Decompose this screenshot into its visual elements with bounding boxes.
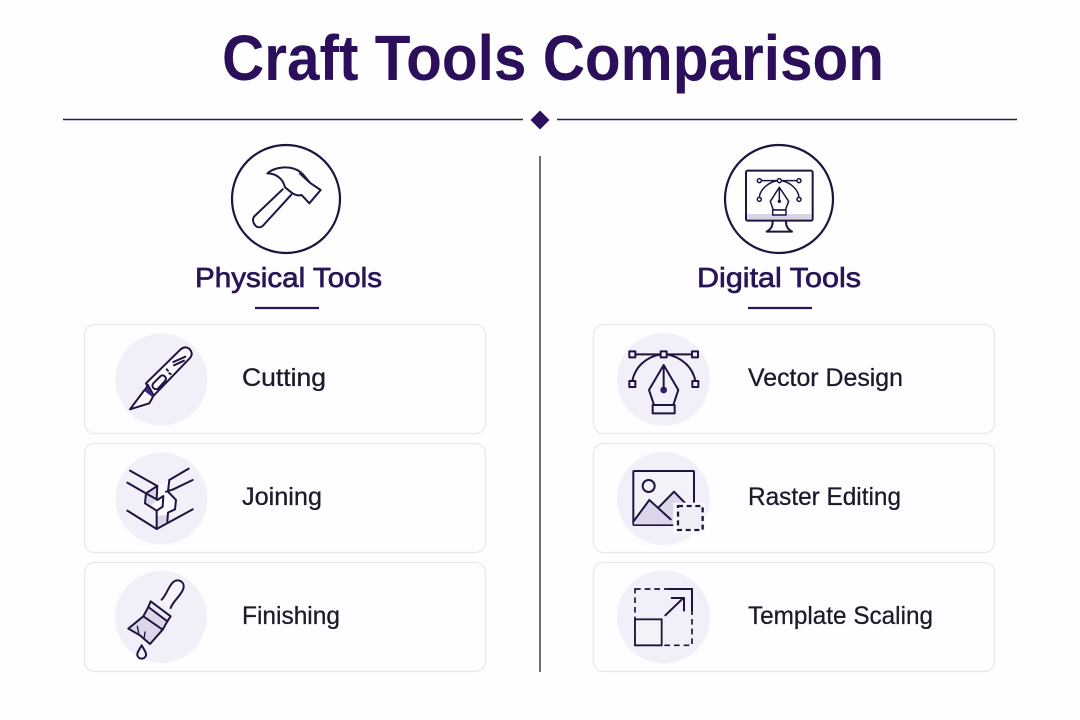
label: finishing: Finishing <box>242 602 340 630</box>
label: cutting: Cutting <box>242 364 326 392</box>
icon: monitor with pen tool in circle <box>725 145 833 253</box>
card: template scaling <box>594 562 994 672</box>
icon: image with dashed selection <box>633 471 705 533</box>
icon: hammer in circle <box>232 145 340 253</box>
card: joining <box>84 444 486 552</box>
card: raster editing <box>594 444 994 552</box>
panel: physical tools <box>84 145 486 672</box>
card: finishing <box>84 562 486 672</box>
column divider <box>539 156 541 672</box>
title divider with diamond <box>63 110 1017 130</box>
heading underline <box>255 307 319 309</box>
label: vector design: Vector Design <box>748 364 903 392</box>
icon: scale template <box>635 589 692 645</box>
title: Craft Tools Comparison <box>222 22 884 94</box>
label: joining: Joining <box>242 483 322 511</box>
label: raster editing: Raster Editing <box>748 483 901 511</box>
heading: digital tools: Digital Tools <box>697 262 861 293</box>
icon: pen tool <box>629 351 698 413</box>
card: vector design <box>594 324 994 434</box>
panel: digital tools <box>594 145 994 672</box>
heading underline <box>748 307 812 309</box>
card: cutting <box>84 324 486 434</box>
icon: craft knife <box>130 347 192 409</box>
icon: wood joint <box>127 469 193 529</box>
icon: paint brush <box>128 580 184 659</box>
label: template scaling: Template Scaling <box>748 602 933 630</box>
heading: physical tools: Physical Tools <box>195 262 382 293</box>
